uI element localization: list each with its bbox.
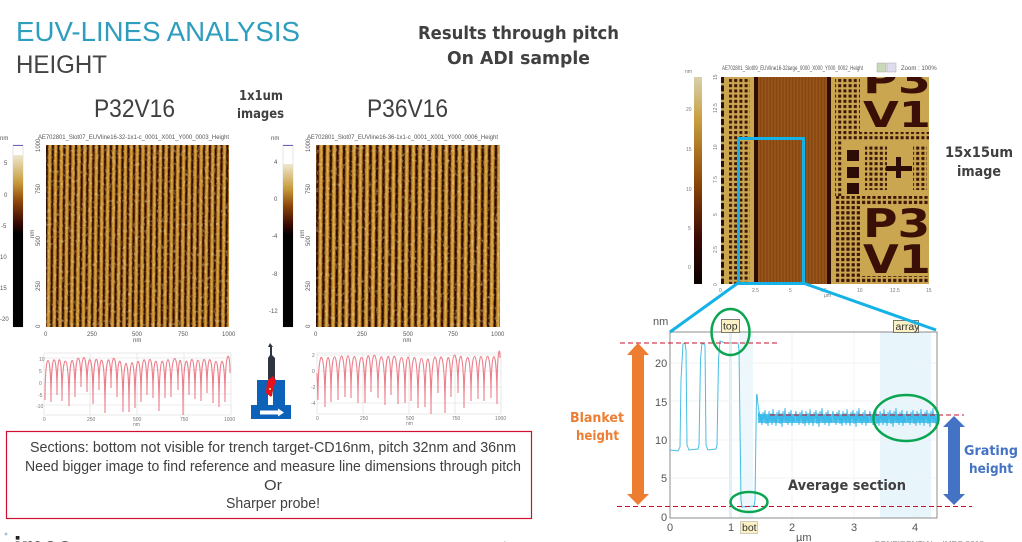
chart: P36 section profile: 500 [406,416,415,422]
label: 1x1um images [237,88,284,122]
chart: P32 section profile: 250 [87,417,96,423]
axis ticks: P32 [30,138,236,344]
chart: P36 section profile: 1000 [495,416,506,422]
AFM stripes: P36 [316,145,500,327]
axis ticks: 15x15um: 10 [713,144,719,150]
AFM map: test structures: P3 [863,58,931,102]
axis ticks: 15x15um: 7.5 [713,176,719,183]
arrow: blanket height [627,343,649,505]
colour scale: P36: 4 [274,160,278,166]
image caption: P36: AE702801_Slot07_EUVline16-36-1x1-c_0001_X001_Y000_0006_Height [307,135,498,141]
y-axis labels: 5 [661,473,667,485]
heading: results through pitch: On ADI sample [447,48,590,69]
axis ticks: 15x15um [713,74,932,299]
chart: P32 section profile: 0 [43,417,46,423]
plot frame [670,332,937,518]
colour scale: P32: 15 [0,286,7,292]
colour scale: 15x15um: 15 [686,147,692,153]
panel: P36 AFM image [269,135,505,344]
x-axis labels: 1 [728,522,734,534]
callout: sections conclusion: Sharper probe! [226,496,320,512]
colour scale: P32: -5 [1,224,7,230]
callout: sections conclusion: Or [264,478,282,494]
chart: P36 section profile: 750 [452,416,461,422]
callout: sections conclusion: Need bigger image to find reference and measure line dimensions through pitch [25,459,521,475]
axis ticks: P32: 1000 [36,138,42,152]
axis ticks: 15x15um: 10 [857,288,863,294]
chart: P36 section profile: 2 [312,353,315,359]
colour scale: P32: nm [0,136,8,142]
callout: sections conclusion: Sections: bottom not visible for trench target-CD16nm, pitch 32nm and 36nm [30,440,516,456]
axis ticks: P36: 1000 [306,138,312,152]
heading: P32V16: P32V16 [94,95,175,123]
AFM map: test structures [721,77,929,284]
colour scale: P36: -4 [272,234,278,240]
axis ticks: P36: 1000 [491,332,505,338]
colour scale: P36 [269,136,293,327]
axis ticks: P32: 750 [178,332,189,338]
footer text (cropped) [504,541,984,542]
chart: P36 section profile: 0 [312,369,315,375]
colour scale: P32: 10 [0,255,7,261]
x-axis labels: 3 [851,522,857,534]
axis ticks: P36: 250 [357,332,368,338]
chart: P36 section profile [311,351,506,427]
chart: P32 section profile: 1000 [224,417,235,423]
AFM map: test structures: V16 [863,95,963,136]
axis ticks: 15x15um: 7.5 [820,288,827,294]
colour scale: 15x15um: 20 [686,107,692,113]
label: average section: Average section [788,478,906,494]
axis ticks: 15x15um: 2.5 [752,288,759,294]
label: 1x1um images: images [237,106,284,122]
chart: P32 section profile: nm [133,422,140,428]
chart: P36 section profile: -4 [311,401,316,407]
label: 1x1um images: 1x1um [239,88,283,104]
colour scale: P36: -8 [272,272,278,278]
chart: P36 section profile: 0 [316,416,319,422]
callout lines: zoom from AFM to section [670,138,936,332]
axis ticks: 15x15um: 2.5 [713,246,719,253]
colour scale: 15x15um: nm [685,69,692,75]
axis ticks: P36: nm [403,338,411,344]
y-axis labels: 0 [661,512,667,524]
x-axis labels: 0 [667,522,673,534]
axis ticks: 15x15um: 5 [789,288,792,294]
AFM map: test structures: P36 [863,202,963,247]
marker: array ellipse [874,395,938,441]
axis ticks: 15x15um: 0 [719,288,722,294]
axis ticks: P36: 500 [403,332,414,338]
chart: P36 section profile: -2 [311,385,316,391]
AFM map: test structures: V16 [863,238,963,283]
AFM stripes: P32 [46,145,229,327]
highlighted regions [729,332,931,518]
heading: P36V16: P36V16 [367,95,448,123]
axis ticks: 15x15um: 12.5 [890,288,900,294]
tag: bot: bot [742,522,757,534]
title: EUV-LINES ANALYSIS [16,16,300,47]
chart: P32 section profile: -5 [38,393,43,399]
marker: bottom ellipse [730,492,768,512]
toolbar zoom [877,63,937,72]
colour scale: P32: -20 [0,317,9,323]
chart: P32 section profile: 500 [133,417,142,423]
y-axis labels [653,316,668,524]
y-axis labels: 10 [655,435,667,447]
chart: P32 section profile [36,353,235,428]
axis ticks: 15x15um: 15 [926,288,932,294]
section trace [670,341,938,507]
y-axis labels: 15 [655,397,667,409]
y-axis labels: nm [653,316,668,328]
axis ticks: P32: 500 [132,332,143,338]
colour scale: P36: -12 [269,309,278,315]
axis ticks: 15x15um: 15 [713,74,719,80]
axis ticks: P36: 500 [306,235,312,246]
chart: P32 section profile: -10 [36,404,43,410]
x-axis labels [667,522,918,542]
tag: array: array [896,321,920,333]
colour scale: 15x15um: 0 [688,265,691,271]
arrow: grating height [943,416,965,505]
chart: P32 section profile: 10 [39,357,45,363]
x-axis labels: 4 [912,522,918,534]
callout: sections conclusion [6,432,532,518]
marker: top ellipse [712,309,750,355]
heading: results through pitch: Results through pitch [418,23,619,44]
chart: P32 section profile: 5 [39,369,42,375]
axis ticks: P36: 0 [314,332,318,338]
label: 15x15um image: image [957,164,1001,180]
chart: P32 section profile: 750 [180,417,189,423]
axis ticks: P32: 750 [36,183,42,194]
colour scale: 15x15um: 5 [688,226,691,232]
axis ticks: P32: nm [133,338,141,344]
axis ticks: 15x15um: µm [824,293,831,299]
axis ticks: P32: 250 [36,280,42,291]
chart: P36 section profile: nm [406,421,413,427]
label: grating height: height [969,462,1013,477]
chart: average section [617,309,972,542]
y-axis labels: 20 [655,358,667,370]
axis ticks: P32: 1000 [222,332,236,338]
axis ticks: P32: nm [30,230,36,238]
colour scale: 15x15um [685,69,702,284]
colour scale: P32: 0 [4,193,8,199]
axis ticks: 15x15um: 12.5 [713,103,719,113]
axis ticks: P32: 0 [44,332,48,338]
axis ticks: P36: 0 [306,324,312,328]
axis ticks: P36: 750 [306,183,312,194]
label: blanket height: Blanket [570,411,624,426]
subtitle: height: HEIGHT [16,51,107,79]
toolbar zoom: Zoom : 100% [901,66,937,72]
label: blanket height [570,411,624,444]
chart: P36 section profile: 250 [360,416,369,422]
axis ticks: P36: 750 [448,332,459,338]
axis ticks: P36 [300,138,505,344]
x-axis labels: 2 [789,522,795,534]
label: grating height [964,444,1018,477]
label: blanket height: height [576,429,619,444]
label: 15x15um image: 15x15um [945,145,1013,161]
icon: AFM probe in trench [251,343,291,419]
image caption: 15x15um: AE702801_Slot09_EUVline16-32large_0000_X000_Y000_0002_Height [722,66,863,72]
axis ticks: P32: 0 [36,324,42,328]
colour scale: P32 [0,136,23,327]
chart: P32 section profile: 0 [39,381,42,387]
reference lines [617,343,972,506]
image caption: P32: AE702801_Slot07_EUVline16-32-1x1-c_0001_X001_Y000_0003_Height [38,135,229,141]
axis ticks: P36: 250 [306,280,312,291]
axis ticks: P32: 250 [87,332,98,338]
colour scale: P32: 5 [4,161,8,167]
tag: top: top [723,320,738,332]
colour scale: P36: 0 [274,197,278,203]
panel: P32 AFM image [0,135,236,344]
colour scale: P36: nm [271,136,279,142]
label: grating height: Grating [964,444,1018,459]
panel: 15x15um AFM image [685,62,936,298]
colour scale: 15x15um: 10 [686,187,692,193]
heading: results through pitch [418,23,619,69]
label: 15x15um image [945,145,1013,180]
axis ticks: 15x15um: 0 [713,283,719,286]
axis ticks: P32: 500 [36,235,42,246]
axis ticks: 15x15um: 5 [713,213,719,216]
axis ticks: P36: nm [300,230,306,238]
